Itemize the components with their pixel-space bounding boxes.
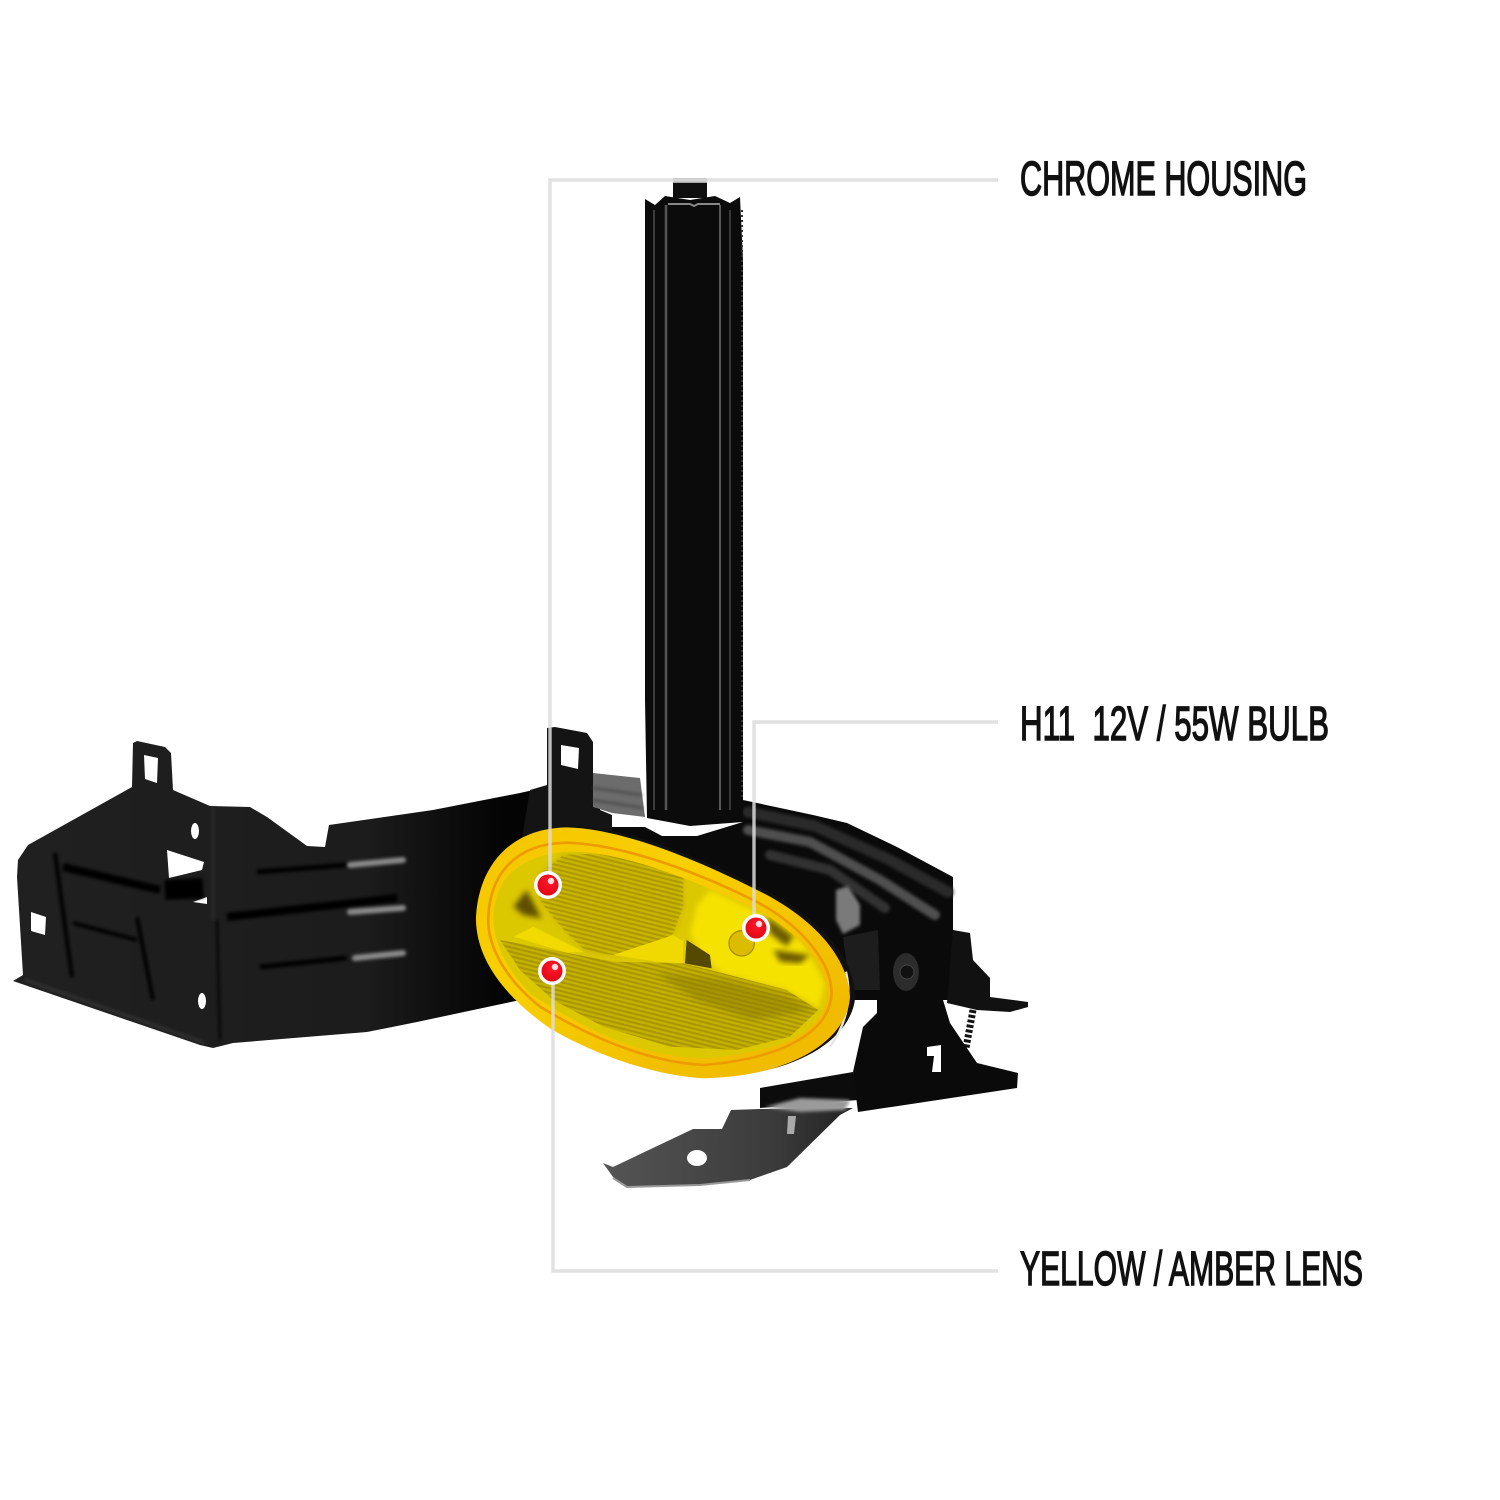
upper reflector bbox=[537, 853, 683, 955]
lens dark backing bbox=[481, 826, 855, 1077]
vertical mounting post bbox=[645, 178, 743, 826]
lower mounting plate bbox=[603, 1072, 858, 1187]
plate embossed tab bbox=[787, 1116, 796, 1134]
lens orange ring bbox=[488, 843, 832, 1065]
lens silver edge bbox=[830, 972, 848, 1047]
right housing body bbox=[612, 800, 1028, 1112]
post vertical highlights bbox=[654, 204, 742, 810]
label: bulb: H11 12V / 55W BULB bbox=[1020, 698, 1329, 751]
lens glass bbox=[493, 852, 827, 1058]
leader: bulb bbox=[754, 722, 998, 916]
bracket slot bbox=[927, 1045, 941, 1072]
bracket creases and slots bbox=[25, 807, 397, 1043]
mount bolt bbox=[893, 953, 919, 991]
lower stripes bbox=[500, 940, 818, 1050]
lens outer rim bbox=[476, 827, 850, 1078]
dark reflections bbox=[513, 890, 542, 918]
callout dot: lens bbox=[538, 957, 566, 985]
leader: lens bbox=[553, 984, 998, 1271]
bright wedges bbox=[513, 927, 583, 953]
label: chrome housing: CHROME HOUSING bbox=[1020, 153, 1307, 206]
callout dot: chrome housing bbox=[534, 871, 562, 899]
housing reflective bands bbox=[748, 812, 948, 915]
pivot cylinder bbox=[843, 930, 880, 990]
leader: chrome housing bbox=[550, 180, 998, 872]
small rear hardware bbox=[947, 930, 1028, 1012]
plate shiny fold bbox=[765, 1098, 850, 1112]
darker lower shadow bbox=[657, 973, 813, 1020]
left mounting bracket bbox=[13, 741, 600, 1048]
bracket highlights bbox=[350, 860, 403, 958]
callout leader lines bbox=[550, 180, 998, 1271]
bulb bbox=[729, 931, 754, 956]
rear tab and upper shroud bbox=[520, 727, 645, 850]
yellow fog lens bbox=[476, 826, 855, 1078]
callout dot: bulb bbox=[742, 914, 770, 942]
grey inner housing patch bbox=[836, 886, 860, 934]
bright right reflector bbox=[690, 890, 825, 1008]
bracket round holes bbox=[191, 823, 206, 1009]
spring bbox=[966, 1010, 973, 1048]
